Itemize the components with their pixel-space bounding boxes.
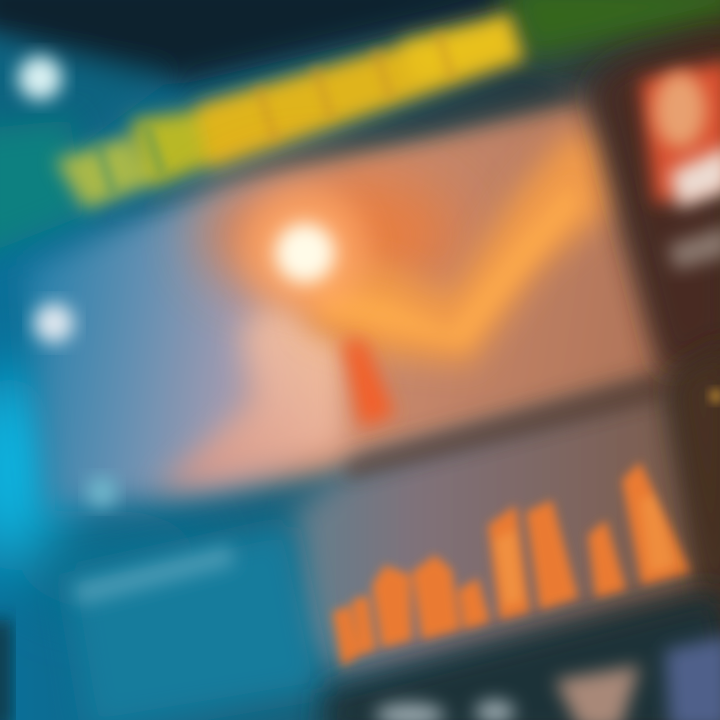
- top-right picture card: [640, 60, 720, 205]
- white glow point: [243, 188, 367, 312]
- teal left band: [0, 120, 85, 260]
- light dots: [18, 56, 117, 507]
- green top-right banner: [500, 0, 720, 60]
- line chart: orange trend line: [300, 135, 610, 365]
- card figure: [654, 72, 720, 208]
- red-orange marker: [342, 340, 395, 428]
- left edge dark sliver: [0, 620, 10, 720]
- lower-left blue panel: [65, 525, 325, 720]
- banner left lettering gaps: [92, 125, 167, 195]
- banner lettering gaps: [253, 30, 457, 143]
- left blue glow: [0, 370, 200, 610]
- lower bar chart panel: [290, 385, 705, 680]
- upper chart panel: [25, 95, 672, 510]
- orange bar chart: [332, 462, 692, 668]
- bottom dark strip: [320, 590, 720, 720]
- panel label stripe: [72, 545, 235, 605]
- line chart: bright core: [320, 185, 580, 345]
- amber side dot: [709, 389, 720, 403]
- line chart: left peak: [155, 300, 345, 490]
- banner shadow: [90, 72, 590, 225]
- warm orange haze: [200, 170, 460, 300]
- top dark band: [0, 0, 560, 250]
- right side text stub: [668, 225, 720, 270]
- bottom thumbnails: [375, 635, 720, 720]
- right dark frame: [590, 35, 720, 375]
- panel divider: [345, 380, 668, 478]
- yellow headline banner: [55, 12, 525, 210]
